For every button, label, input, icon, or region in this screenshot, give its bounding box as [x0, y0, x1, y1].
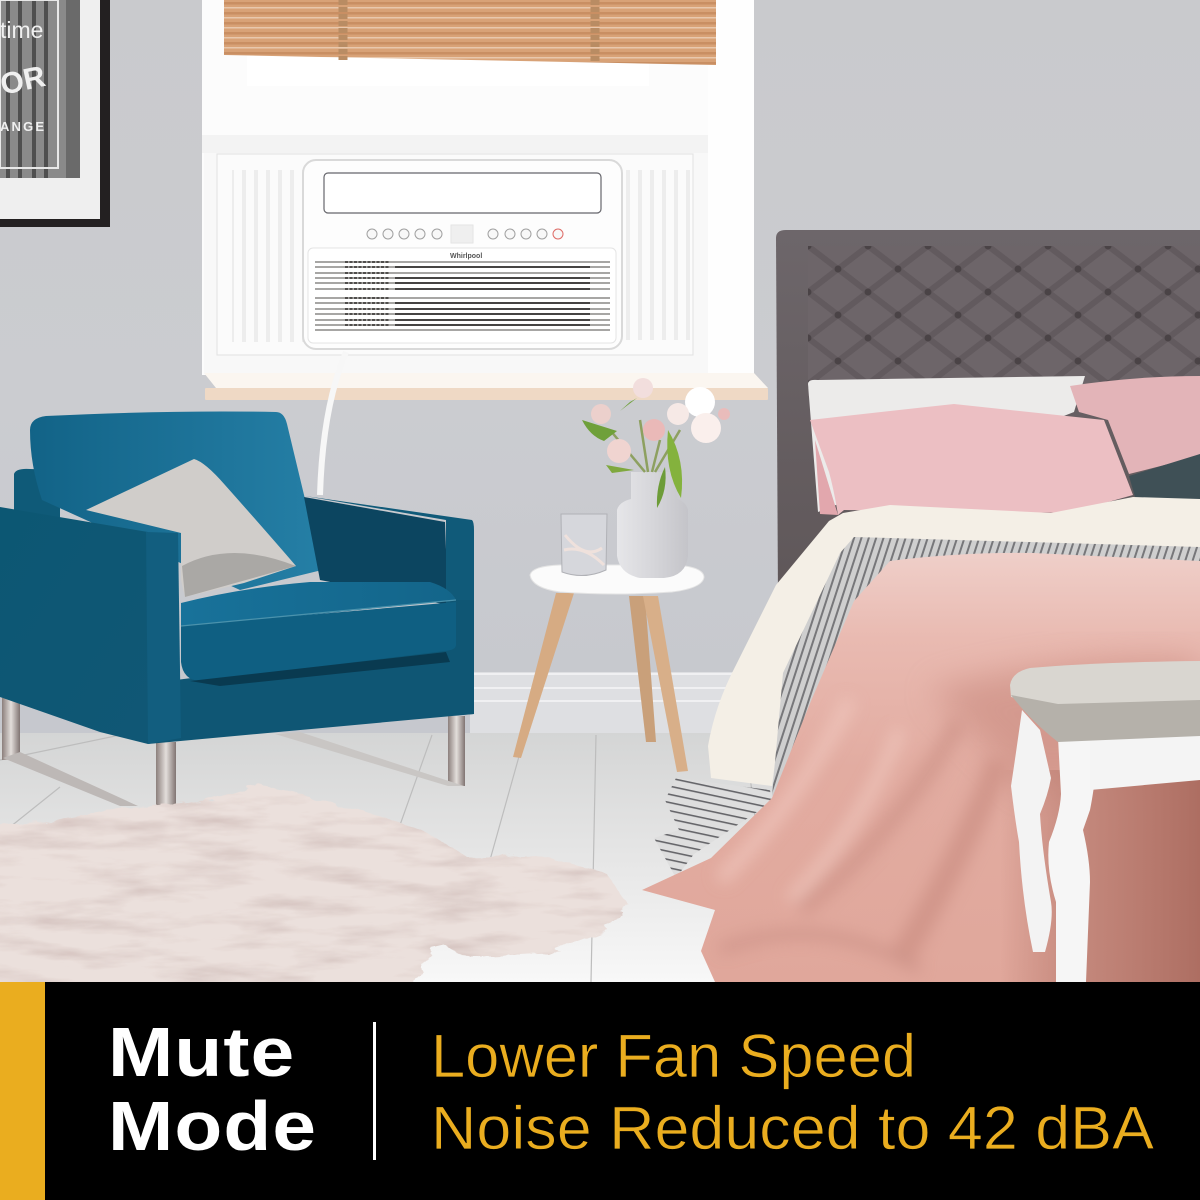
seat cushion front	[181, 602, 456, 681]
bed	[642, 376, 1200, 982]
bench apron	[1090, 736, 1200, 790]
flowers	[582, 378, 730, 508]
table legs	[513, 593, 574, 758]
banner background	[0, 982, 1200, 1200]
pink back pillow	[1070, 376, 1200, 474]
bottom banner	[0, 982, 1200, 1200]
pillow underside	[815, 440, 838, 515]
white pillow	[808, 376, 1085, 512]
chair legs	[2, 698, 465, 806]
seat cushion top	[181, 582, 456, 628]
side table	[513, 378, 730, 772]
right arm inner	[304, 497, 448, 605]
bench cushion top	[1010, 661, 1200, 706]
front arm front panel	[146, 532, 181, 744]
blanket shading	[720, 658, 1200, 982]
back left bump	[14, 469, 60, 530]
window sill	[204, 373, 768, 400]
subtext: Lower Fan Speed	[431, 1022, 916, 1090]
seat piping	[181, 600, 456, 626]
striped throw	[654, 778, 772, 878]
subtext: Noise Reduced to 42 dBA	[431, 1094, 1154, 1162]
heading: Mute	[108, 1013, 295, 1091]
window recess	[202, 0, 754, 375]
subtext	[431, 1022, 1154, 1162]
chair base	[148, 600, 474, 744]
baseboard	[470, 672, 733, 733]
bench rear leg	[1011, 710, 1052, 952]
sheepskin rug	[0, 785, 627, 1000]
unit body	[303, 160, 622, 349]
yellow accent	[0, 982, 45, 1200]
dark pillow	[1129, 454, 1200, 502]
divider	[373, 1022, 376, 1160]
right accordion panel	[620, 170, 690, 340]
vase	[617, 472, 688, 578]
bench front leg	[1048, 738, 1097, 982]
power cord	[320, 352, 346, 495]
heading: Mode	[108, 1087, 317, 1165]
white duvet	[708, 497, 1200, 786]
armchair	[0, 412, 474, 806]
bamboo blind	[224, 0, 716, 65]
throw pillow	[86, 459, 296, 597]
right arm	[305, 496, 474, 716]
pink blanket	[642, 553, 1200, 982]
striped sheet	[772, 537, 1200, 796]
front arm side panel	[0, 507, 148, 744]
grille panel	[308, 248, 616, 343]
headboard	[776, 230, 1200, 600]
heading	[108, 1013, 317, 1165]
left accordion panel	[232, 170, 304, 342]
framed poster	[0, 0, 110, 227]
inner panel	[217, 154, 693, 355]
glass jar	[561, 514, 607, 576]
air conditioner	[204, 153, 708, 374]
seat shadow	[190, 652, 450, 686]
front pink pillow	[810, 404, 1133, 515]
back cushion	[30, 412, 322, 590]
pillow shading	[182, 553, 296, 597]
bench cushion front	[1011, 695, 1200, 742]
side panel frame	[204, 153, 708, 374]
framed poster: ANGE	[0, 119, 44, 134]
control panel	[367, 225, 563, 243]
blind cords	[343, 0, 595, 62]
grille louvers	[315, 262, 610, 330]
framed poster: time	[0, 17, 43, 43]
background wall	[0, 0, 1200, 735]
tufted bench	[1010, 661, 1200, 982]
table top	[530, 565, 704, 594]
floor	[0, 733, 1200, 983]
whirlpool logo: Whirlpool	[450, 253, 482, 260]
air vent door	[324, 173, 601, 213]
